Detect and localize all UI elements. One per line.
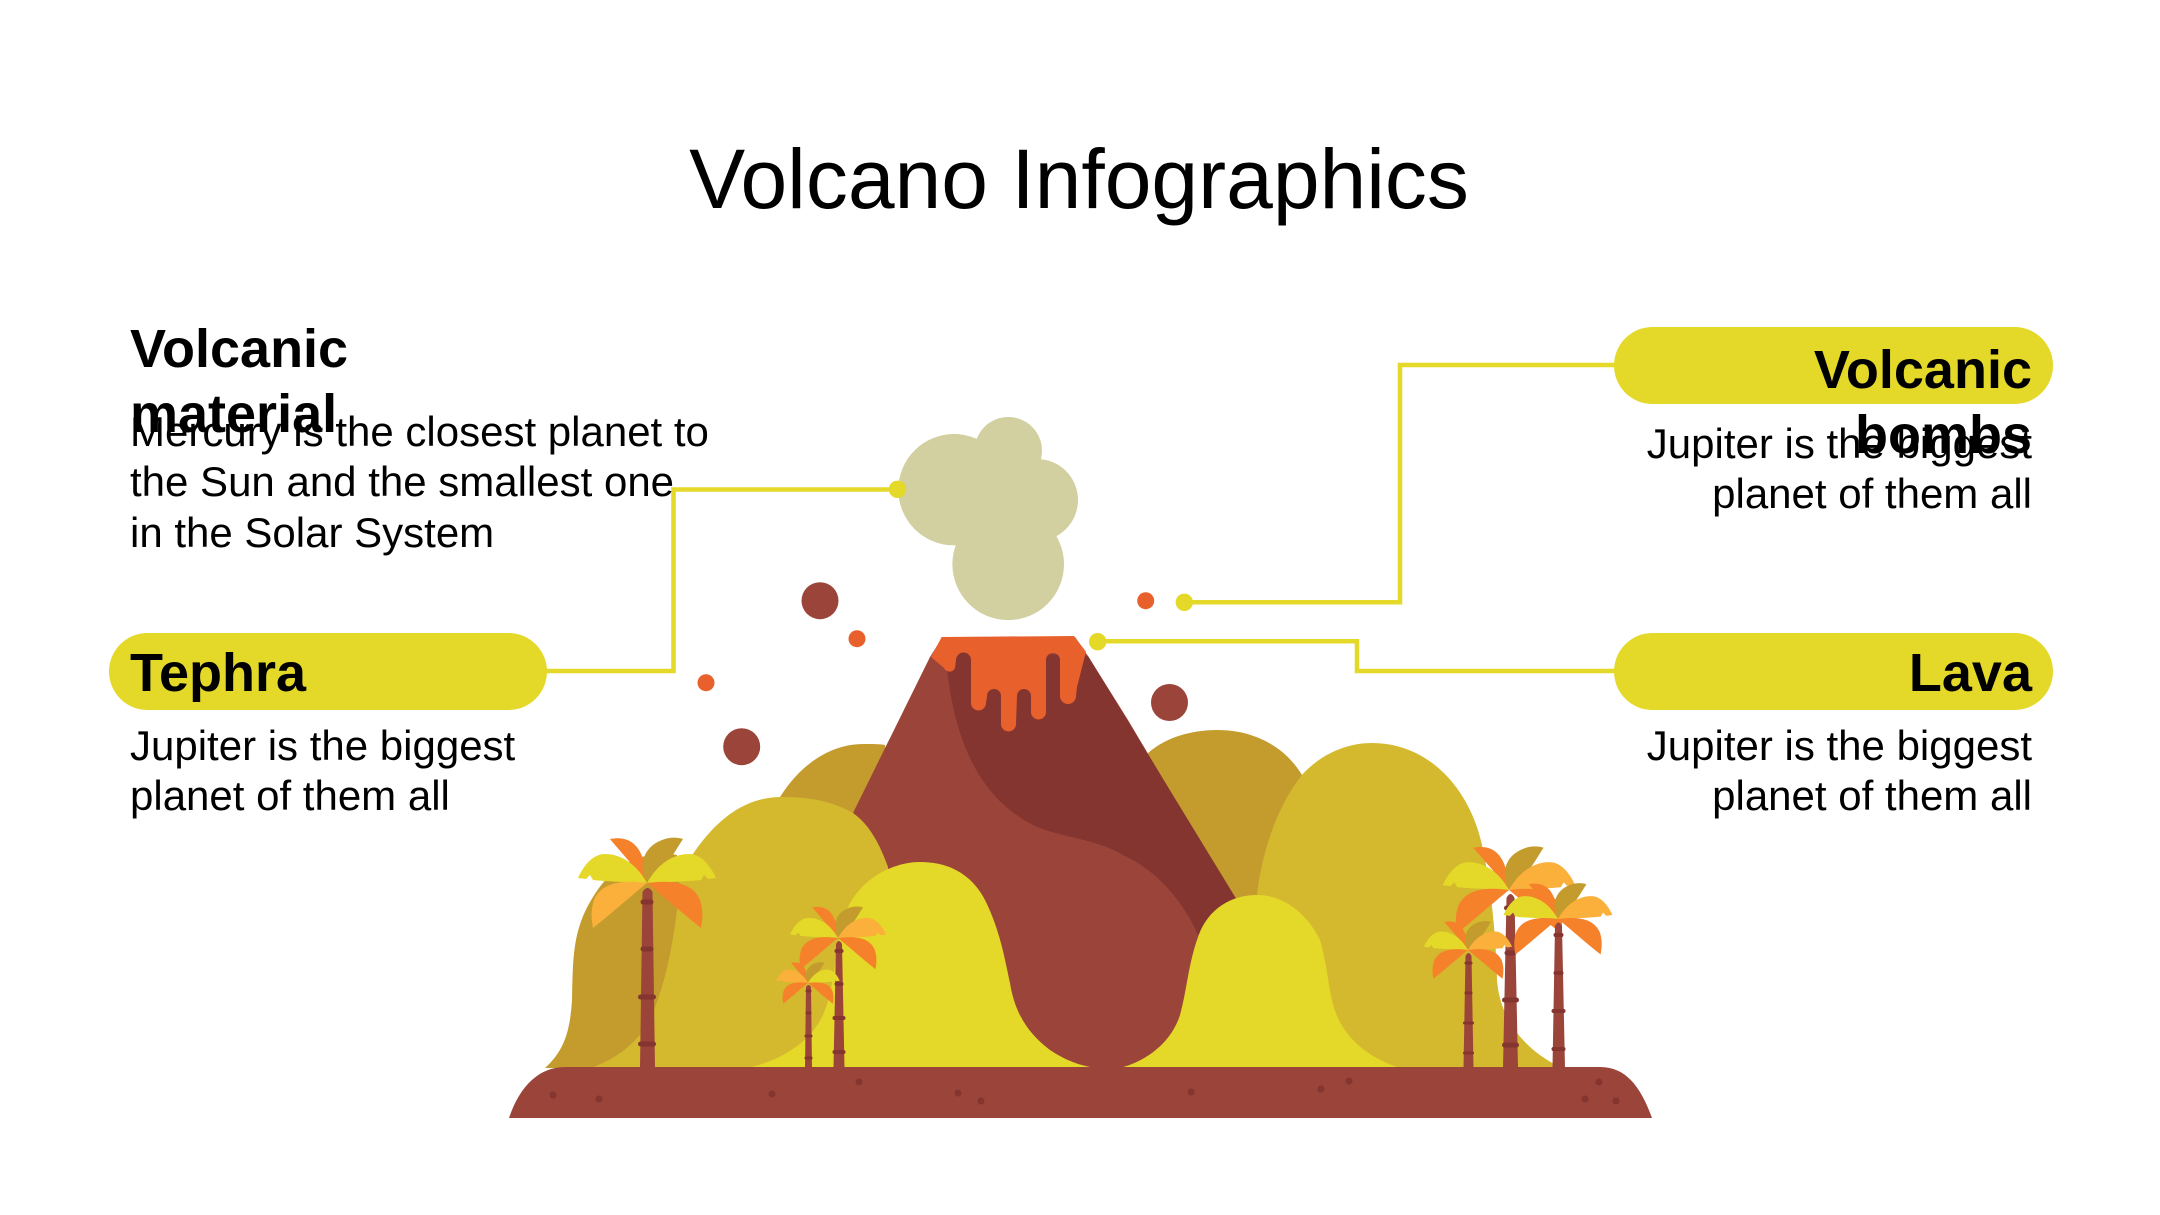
connector: lava (1098, 641, 1615, 671)
palm 3 (776, 962, 840, 1068)
heading: lava: Lava (1909, 643, 2033, 703)
ground (509, 1067, 1652, 1118)
heading: volcanic bombs: bombs (1855, 405, 2032, 465)
text: volcanic material description: the Sun and the smallest one (130, 458, 674, 505)
pill: tephra (109, 633, 547, 710)
text: lava description: planet of them all (1712, 772, 2032, 819)
lava (931, 636, 1086, 732)
title: Volcano Infographics (689, 132, 1469, 226)
connector end dots (889, 481, 1193, 650)
volcano illustration (509, 417, 1652, 1118)
connector: volcanic bombs (1184, 365, 1615, 602)
palm 1 (578, 838, 716, 1068)
panel: tephra (109, 633, 547, 819)
text: tephra description: planet of them all (130, 772, 450, 819)
panel: lava (1614, 633, 2053, 819)
panel: volcanic material (130, 319, 709, 556)
panel: volcanic bombs (1614, 327, 2053, 517)
heading: volcanic material: Volcanic (130, 319, 348, 379)
text: tephra description: Jupiter is the biggest (130, 722, 516, 769)
connector: tephra to cloud (546, 490, 897, 671)
text: lava description: Jupiter is the biggest (1647, 722, 2032, 769)
palm 6 (1424, 921, 1512, 1068)
volcano shadow (947, 650, 1240, 935)
volcano body (730, 637, 1330, 1067)
left far hill (545, 854, 679, 1068)
heading: tephra: Tephra (130, 643, 307, 703)
ash cloud (898, 417, 1078, 620)
front hills (747, 862, 1400, 1068)
palm 5 (1503, 883, 1613, 1068)
text: volcanic material description: Mercury is the closest planet to (130, 408, 709, 455)
ground specks (550, 1078, 1620, 1104)
orange lava drops (698, 592, 1154, 691)
back hills (780, 730, 1320, 1000)
heading: volcanic bombs: Volcanic (1814, 340, 2032, 400)
palm 4 (1443, 846, 1575, 1068)
text: volcanic bombs description: planet of them all (1712, 470, 2032, 517)
palm 2 (790, 906, 886, 1068)
mid hills (580, 743, 1560, 1068)
pill: lava (1614, 633, 2053, 710)
text: volcanic material description: in the Solar System (130, 509, 494, 556)
pill: volcanic bombs (1614, 327, 2053, 404)
heading: volcanic material: material (130, 384, 337, 444)
brown tephra rocks (723, 582, 1188, 765)
text: volcanic bombs description: Jupiter is the biggest (1647, 420, 2032, 467)
